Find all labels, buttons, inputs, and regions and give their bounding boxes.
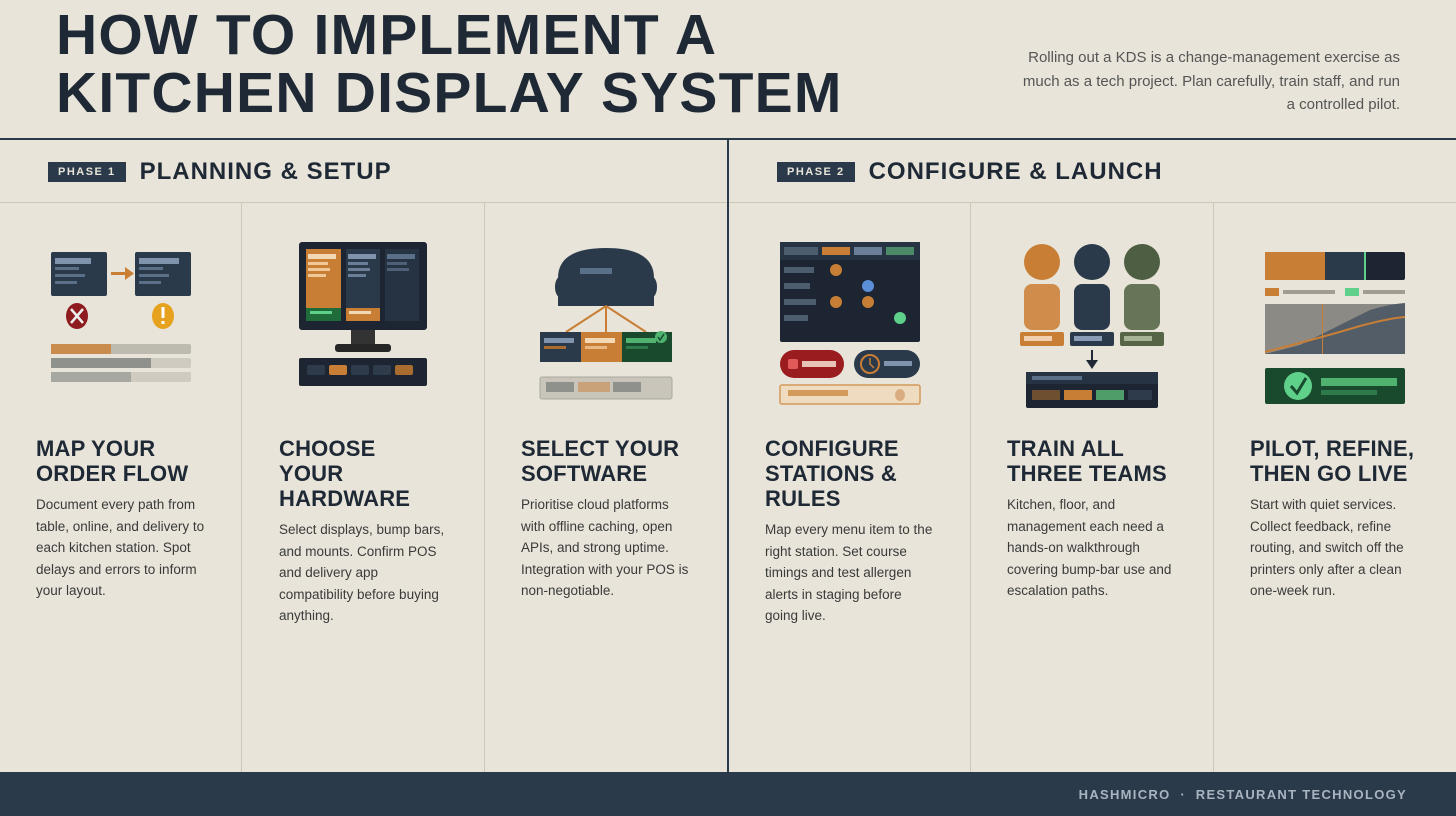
title: HOW TO IMPLEMENT A xyxy=(56,3,717,67)
panel: select software xyxy=(521,248,688,598)
heading: CONFIGURE STATIONS & RULES xyxy=(765,436,899,511)
footer: HASHMICRO · RESTAURANT TECHNOLOGY xyxy=(1079,787,1407,802)
icon: station grid xyxy=(779,242,921,405)
panel: map order flow xyxy=(36,252,204,598)
phase 1 header: PLANNING & SETUP xyxy=(140,158,392,185)
body text: Map every menu item to the right station. Set course timings and test allergen alerts in staging before going live. xyxy=(765,522,932,623)
body text: Document every path from table, online, and delivery to each kitchen station. Spot delays and errors to inform your layout. xyxy=(36,497,204,598)
panel: choose hardware xyxy=(279,242,444,623)
panel: configure stations xyxy=(765,242,932,623)
icon: monitor xyxy=(299,242,427,386)
phase 1 header: PHASE 1 xyxy=(58,166,116,178)
heading: SELECT YOUR SOFTWARE xyxy=(521,436,679,486)
phase 2 header: PHASE 2 xyxy=(787,166,845,178)
panel: pilot xyxy=(1250,252,1414,598)
heading: MAP YOUR ORDER FLOW xyxy=(36,436,188,486)
heading: TRAIN ALL THREE TEAMS xyxy=(1007,436,1167,486)
body text: Prioritise cloud platforms with offline caching, open APIs, and strong uptime. Integration with your POS is non-negotiable. xyxy=(521,497,688,598)
footer xyxy=(0,772,1456,816)
phase 2 header: CONFIGURE & LAUNCH xyxy=(869,158,1163,185)
body text: Start with quiet services. Collect feedback, refine routing, and switch off the printers only after a clean one-week run. xyxy=(1250,497,1404,598)
body text: Select displays, bump bars, and mounts. Confirm POS and delivery app compatibility before buying anything. xyxy=(279,522,444,623)
body text: Kitchen, floor, and management each need a hands-on walkthrough covering bump-bar use and escalation paths. xyxy=(1007,497,1171,598)
heading: CHOOSE YOUR HARDWARE xyxy=(279,436,410,511)
title: KITCHEN DISPLAY SYSTEM xyxy=(56,61,843,125)
intro text: Rolling out a KDS is a change-management exercise as much as a tech project. Plan carefully, train staff, and run a controlled pilot. xyxy=(1023,49,1400,113)
icon: pilot chart xyxy=(1264,252,1406,404)
icon: cloud xyxy=(540,248,672,400)
panel: train teams xyxy=(1007,244,1171,598)
icon: order flow xyxy=(51,252,191,382)
title xyxy=(56,3,843,125)
icon: three people xyxy=(1020,244,1164,408)
heading: PILOT, REFINE, THEN GO LIVE xyxy=(1250,436,1414,486)
